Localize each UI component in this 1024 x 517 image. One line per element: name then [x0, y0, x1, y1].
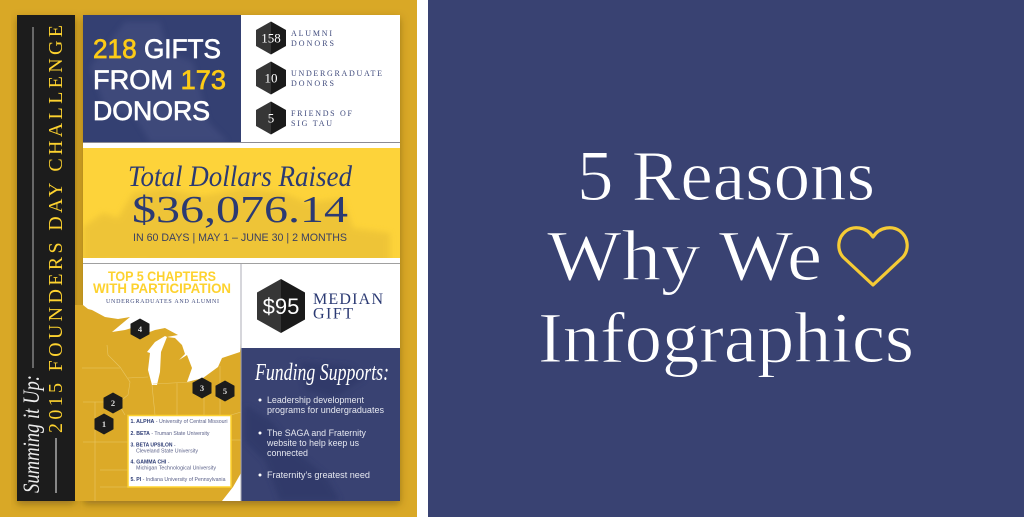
- map marker 2: 2: [111, 398, 115, 408]
- icon: hexagon 10: 10: [264, 70, 278, 86]
- sidebar heading: challenge name: 2015 FOUNDERS DAY CHALLENGE: [45, 25, 67, 433]
- icon: hexagon 158: 158: [261, 30, 281, 46]
- label: friends of sig tau: FRIENDS OF: [291, 109, 353, 118]
- legend: chapter list: Michigan Technological University: [136, 466, 217, 472]
- map marker 3: [192, 378, 212, 398]
- panel: donor breakdown: [83, 15, 400, 143]
- title: 5 Reasons Why We Love Infographics: Why We: [547, 216, 822, 296]
- panel: gifts and donors headline: FROM 173: [93, 65, 226, 95]
- panel: funding supports: [242, 348, 400, 501]
- panel: gold infographic backdrop: [0, 0, 417, 517]
- panel: total dollars raised: Total Dollars Raised: [128, 160, 353, 193]
- legend: chapter list: 4. GAMMA CHI -: [130, 460, 170, 466]
- panel: gifts and donors headline: 218 GIFTS: [93, 34, 221, 64]
- panel: funding supports: Funding Supports:: [254, 360, 389, 386]
- card base: [83, 15, 400, 501]
- panel: gifts and donors headline: [83, 15, 241, 142]
- map marker 5: 5: [223, 386, 227, 396]
- legend: chapter list: 1. ALPHA - University of Central Missouri: [130, 419, 228, 425]
- map marker 3: 3: [200, 383, 204, 393]
- icon: hexagon $95: $95: [263, 294, 299, 319]
- map marker 5: [216, 380, 234, 402]
- map: state lines: [82, 345, 241, 501]
- icon: hexagon 5: [256, 102, 286, 134]
- label: median gift: GIFT: [313, 306, 353, 322]
- title: 5 Reasons Why We Love Infographics: Infographics: [538, 298, 914, 378]
- map marker 1: 1: [102, 419, 106, 429]
- title: 5 Reasons Why We Love Infographics: [538, 136, 914, 378]
- label: median gift: MEDIAN: [313, 291, 383, 308]
- label: alumni donors: DONORS: [291, 39, 334, 48]
- icon: outlined heart: [839, 228, 907, 285]
- label: friends of sig tau: SIG TAU: [291, 119, 332, 128]
- label: undergraduate donors: DONORS: [291, 79, 334, 88]
- bullet list: [258, 395, 384, 481]
- label: undergraduate donors: [291, 69, 382, 88]
- label: undergraduate donors: UNDERGRADUATE: [291, 69, 382, 78]
- legend: chapter list: 2. BETA - Truman State University: [130, 431, 210, 437]
- title: 5 Reasons Why We Love Infographics: 5 Reasons: [577, 136, 875, 216]
- panel: navy title background: [428, 0, 1024, 517]
- bullet list: programs for undergraduates: [267, 405, 384, 416]
- icon: hexagon 158: [256, 22, 286, 54]
- panel: total dollars raised: IN 60 DAYS | MAY 1 – JUNE 30 | 2 MONTHS: [133, 232, 347, 244]
- panel: median gift: [242, 264, 400, 348]
- bullet list: Leadership development: [267, 395, 364, 406]
- legend: chapter list: 3. BETA UPSILON -: [130, 442, 176, 448]
- legend: chapter list: 5. PI - Indiana University of Pennsylvania: [130, 477, 226, 483]
- heading: top 5 chapters: [93, 269, 231, 296]
- bullet list: connected: [267, 448, 308, 459]
- bullet list: website to help keep us: [266, 438, 359, 449]
- map marker 1: [94, 414, 114, 434]
- legend: chapter list: [128, 416, 231, 487]
- icon: hexagon 5: 5: [268, 110, 274, 126]
- bullet list: Fraternity’s greatest need: [267, 470, 370, 481]
- panel: top 5 chapters map: [75, 264, 241, 501]
- map of the midwest: [75, 305, 241, 501]
- panel: infographic card: [17, 15, 400, 501]
- panel: black sidebar: [17, 15, 75, 501]
- map marker 4: 4: [138, 324, 143, 334]
- label: alumni donors: [291, 29, 334, 48]
- icon: hexagon 10: [256, 62, 286, 94]
- panel: total dollars raised: [83, 148, 400, 268]
- label: alumni donors: ALUMNI: [291, 29, 332, 38]
- map marker 2: [104, 392, 122, 414]
- map: lake michigan: [147, 336, 167, 385]
- bullet list: The SAGA and Fraternity: [267, 428, 366, 439]
- label: median gift: [313, 291, 383, 322]
- map marker 4: [130, 318, 150, 340]
- panel: total dollars raised: $36,076.14: [132, 189, 348, 231]
- legend: chapter list: Cleveland State University: [136, 448, 199, 454]
- subheading: undergraduates and alumni: UNDERGRADUATES AND ALUMNI: [106, 299, 219, 305]
- heading: top 5 chapters: WITH PARTICIPATION: [93, 281, 231, 296]
- sidebar script heading: Summing it Up:: [19, 375, 44, 493]
- heading: top 5 chapters: TOP 5 CHAPTERS: [108, 269, 216, 284]
- icon: hexagon $95: [257, 279, 305, 333]
- panel: gifts and donors headline: DONORS: [93, 96, 210, 126]
- label: friends of sig tau: [291, 109, 353, 128]
